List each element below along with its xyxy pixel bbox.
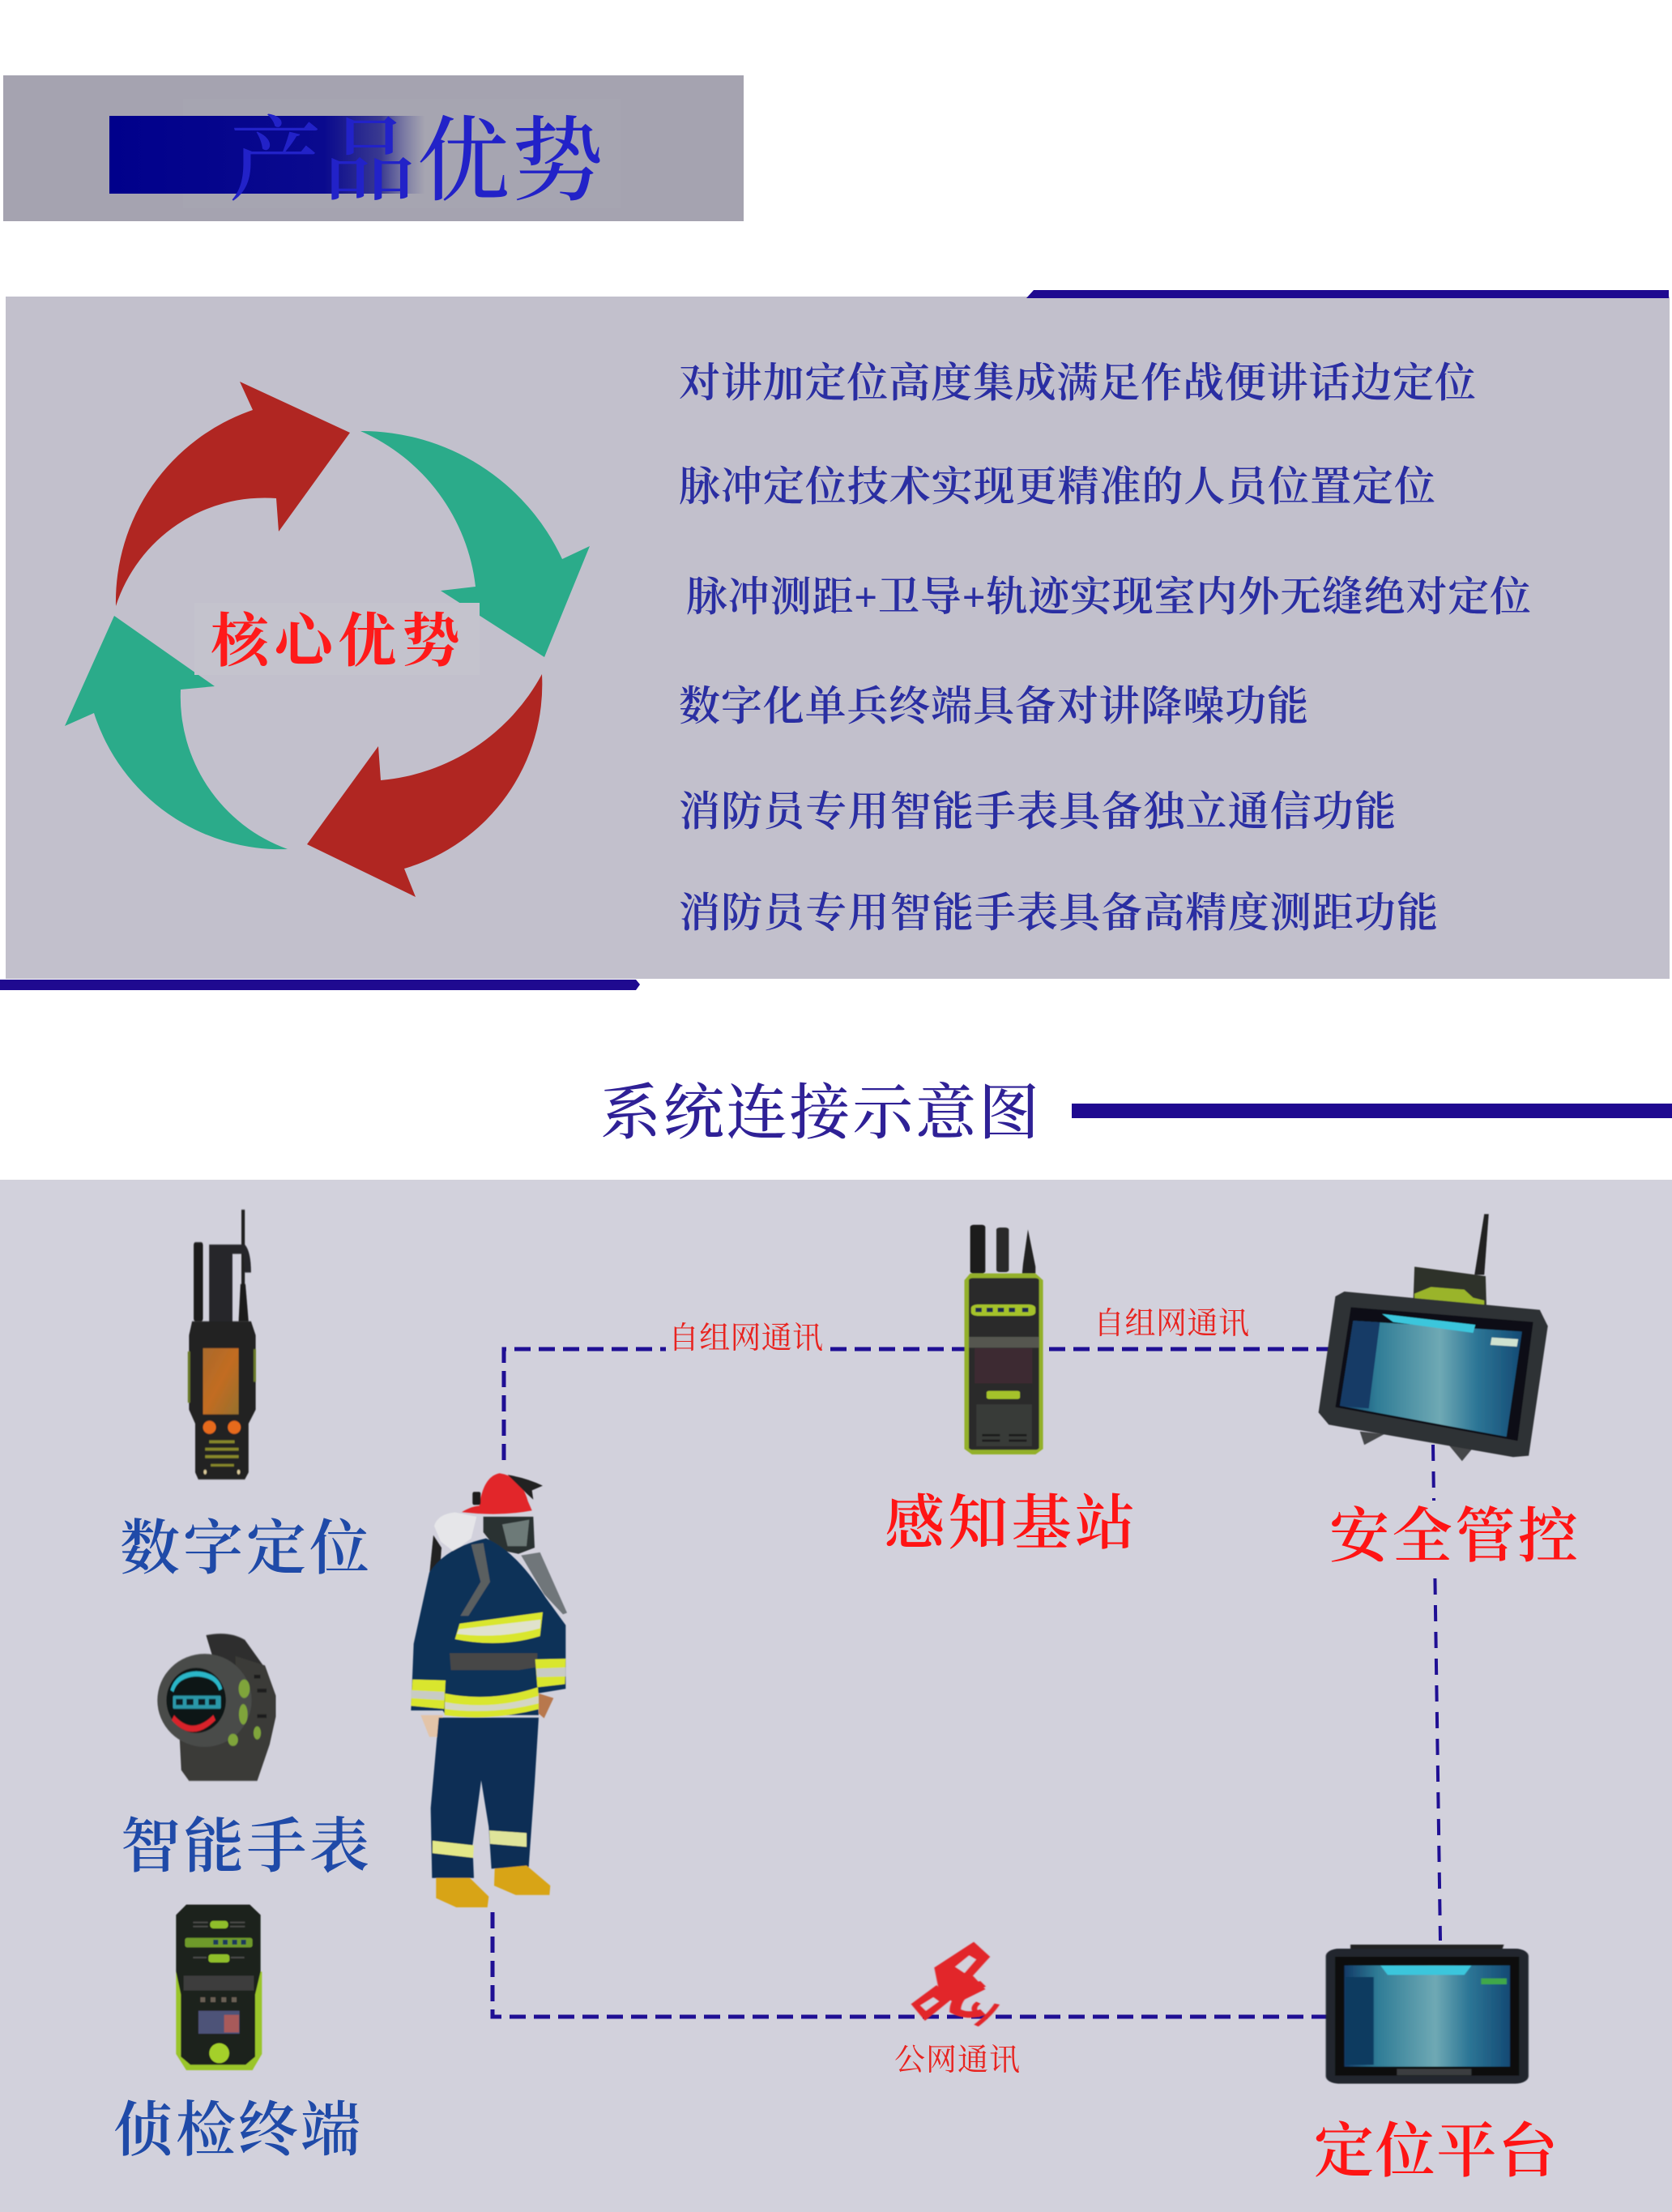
title: 产品优势 xyxy=(229,110,604,213)
dashed connection lines xyxy=(493,1349,1440,2017)
icon: red satellite xyxy=(911,1942,997,2026)
device: positioning platform tablet xyxy=(1326,1945,1529,2084)
advantage list: 脉冲测距+卫导+轨迹实现室内外无缝绝对定位 xyxy=(686,574,1531,621)
advantage list xyxy=(679,361,1531,937)
device: safety control tablet xyxy=(1319,1214,1548,1461)
device label: positioning platform: 定位平台 xyxy=(1314,2119,1559,2185)
link label: ad hoc network 1: 自组网通讯 xyxy=(668,1322,823,1356)
device label: safety control: 安全管控 xyxy=(1329,1504,1578,1570)
device: sensing base station xyxy=(965,1225,1043,1454)
panel: core advantages xyxy=(0,290,1670,990)
advantage list: 对讲加定位高度集成满足作战便讲话边定位 xyxy=(679,361,1476,407)
section title xyxy=(600,1080,1672,1147)
banner dark blue fading bar xyxy=(109,116,425,194)
cycle arrows xyxy=(65,382,590,897)
core label: 核心优势 xyxy=(211,609,460,674)
advantage list: 脉冲定位技术实现更精准的人员位置定位 xyxy=(679,464,1435,510)
advantage list: 消防员专用智能手表具备独立通信功能 xyxy=(679,789,1396,835)
device label: smart watch: 智能手表 xyxy=(121,1814,369,1881)
link label: ad hoc network 2: 自组网通讯 xyxy=(1094,1307,1249,1341)
device label: sensing base station: 感知基站 xyxy=(885,1491,1135,1557)
panel: system diagram xyxy=(0,1180,1672,2212)
device: digital locator radio xyxy=(188,1210,256,1480)
firefighter figure xyxy=(411,1473,567,1907)
panel: title banner xyxy=(3,75,744,221)
link label: public network: 公网通讯 xyxy=(894,2043,1020,2077)
advantage list: 数字化单兵终端具备对讲降噪功能 xyxy=(679,684,1308,730)
section title: 系统连接示意图 xyxy=(600,1080,1039,1147)
device: reconnaissance terminal xyxy=(176,1905,262,2070)
device label: digital locator: 数字定位 xyxy=(120,1516,369,1582)
device label: reconnaissance terminal: 侦检终端 xyxy=(113,2098,360,2164)
device: smart watch xyxy=(157,1633,275,1781)
advantage list: 消防员专用智能手表具备高精度测距功能 xyxy=(679,890,1438,937)
